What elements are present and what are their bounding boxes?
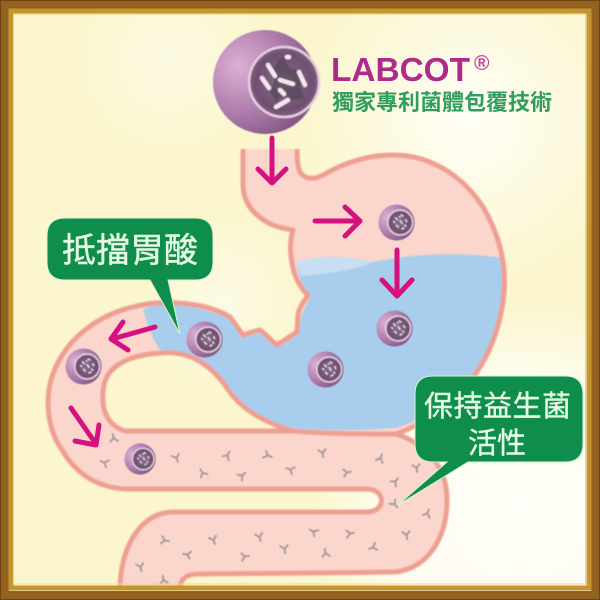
icon: capsule in intestine	[124, 443, 156, 475]
icon: capsule in acid	[376, 310, 413, 347]
gastric acid	[143, 254, 504, 430]
arrow: into esophagus	[258, 138, 286, 183]
callout: keep probiotics active: 保持益生菌	[424, 390, 571, 423]
icon: capsule in lower stomach	[307, 351, 344, 388]
callout: keep probiotics active	[398, 376, 583, 505]
acid surface highlight	[297, 257, 373, 276]
stomach base edge	[292, 431, 396, 434]
icon: capsule in intestine bend	[65, 348, 102, 385]
duodenum hole edge	[103, 353, 292, 431]
organ outline	[48, 149, 504, 586]
organ fill	[48, 149, 504, 586]
icon: large LABCOT capsule	[213, 30, 319, 134]
callout: keep probiotics active: 活性	[468, 427, 526, 460]
registered mark: ®	[474, 52, 490, 75]
icon: capsule in duodenum	[186, 321, 223, 358]
beneficial bacteria	[99, 433, 432, 584]
brand name: LABCOT	[331, 51, 470, 88]
callout: resist stomach acid	[47, 218, 213, 334]
arrow: down through acid	[382, 250, 412, 296]
icon: capsule in stomach top	[378, 204, 415, 241]
arrow: left through duodenum	[111, 322, 155, 350]
stomach and intestine	[48, 149, 504, 586]
arrow: down into intestine	[71, 408, 99, 445]
callout: resist stomach acid: 抵擋胃酸	[62, 232, 198, 270]
brand tagline: 獨家專利菌體包覆技術	[332, 90, 552, 115]
arrow: into stomach	[315, 207, 360, 236]
